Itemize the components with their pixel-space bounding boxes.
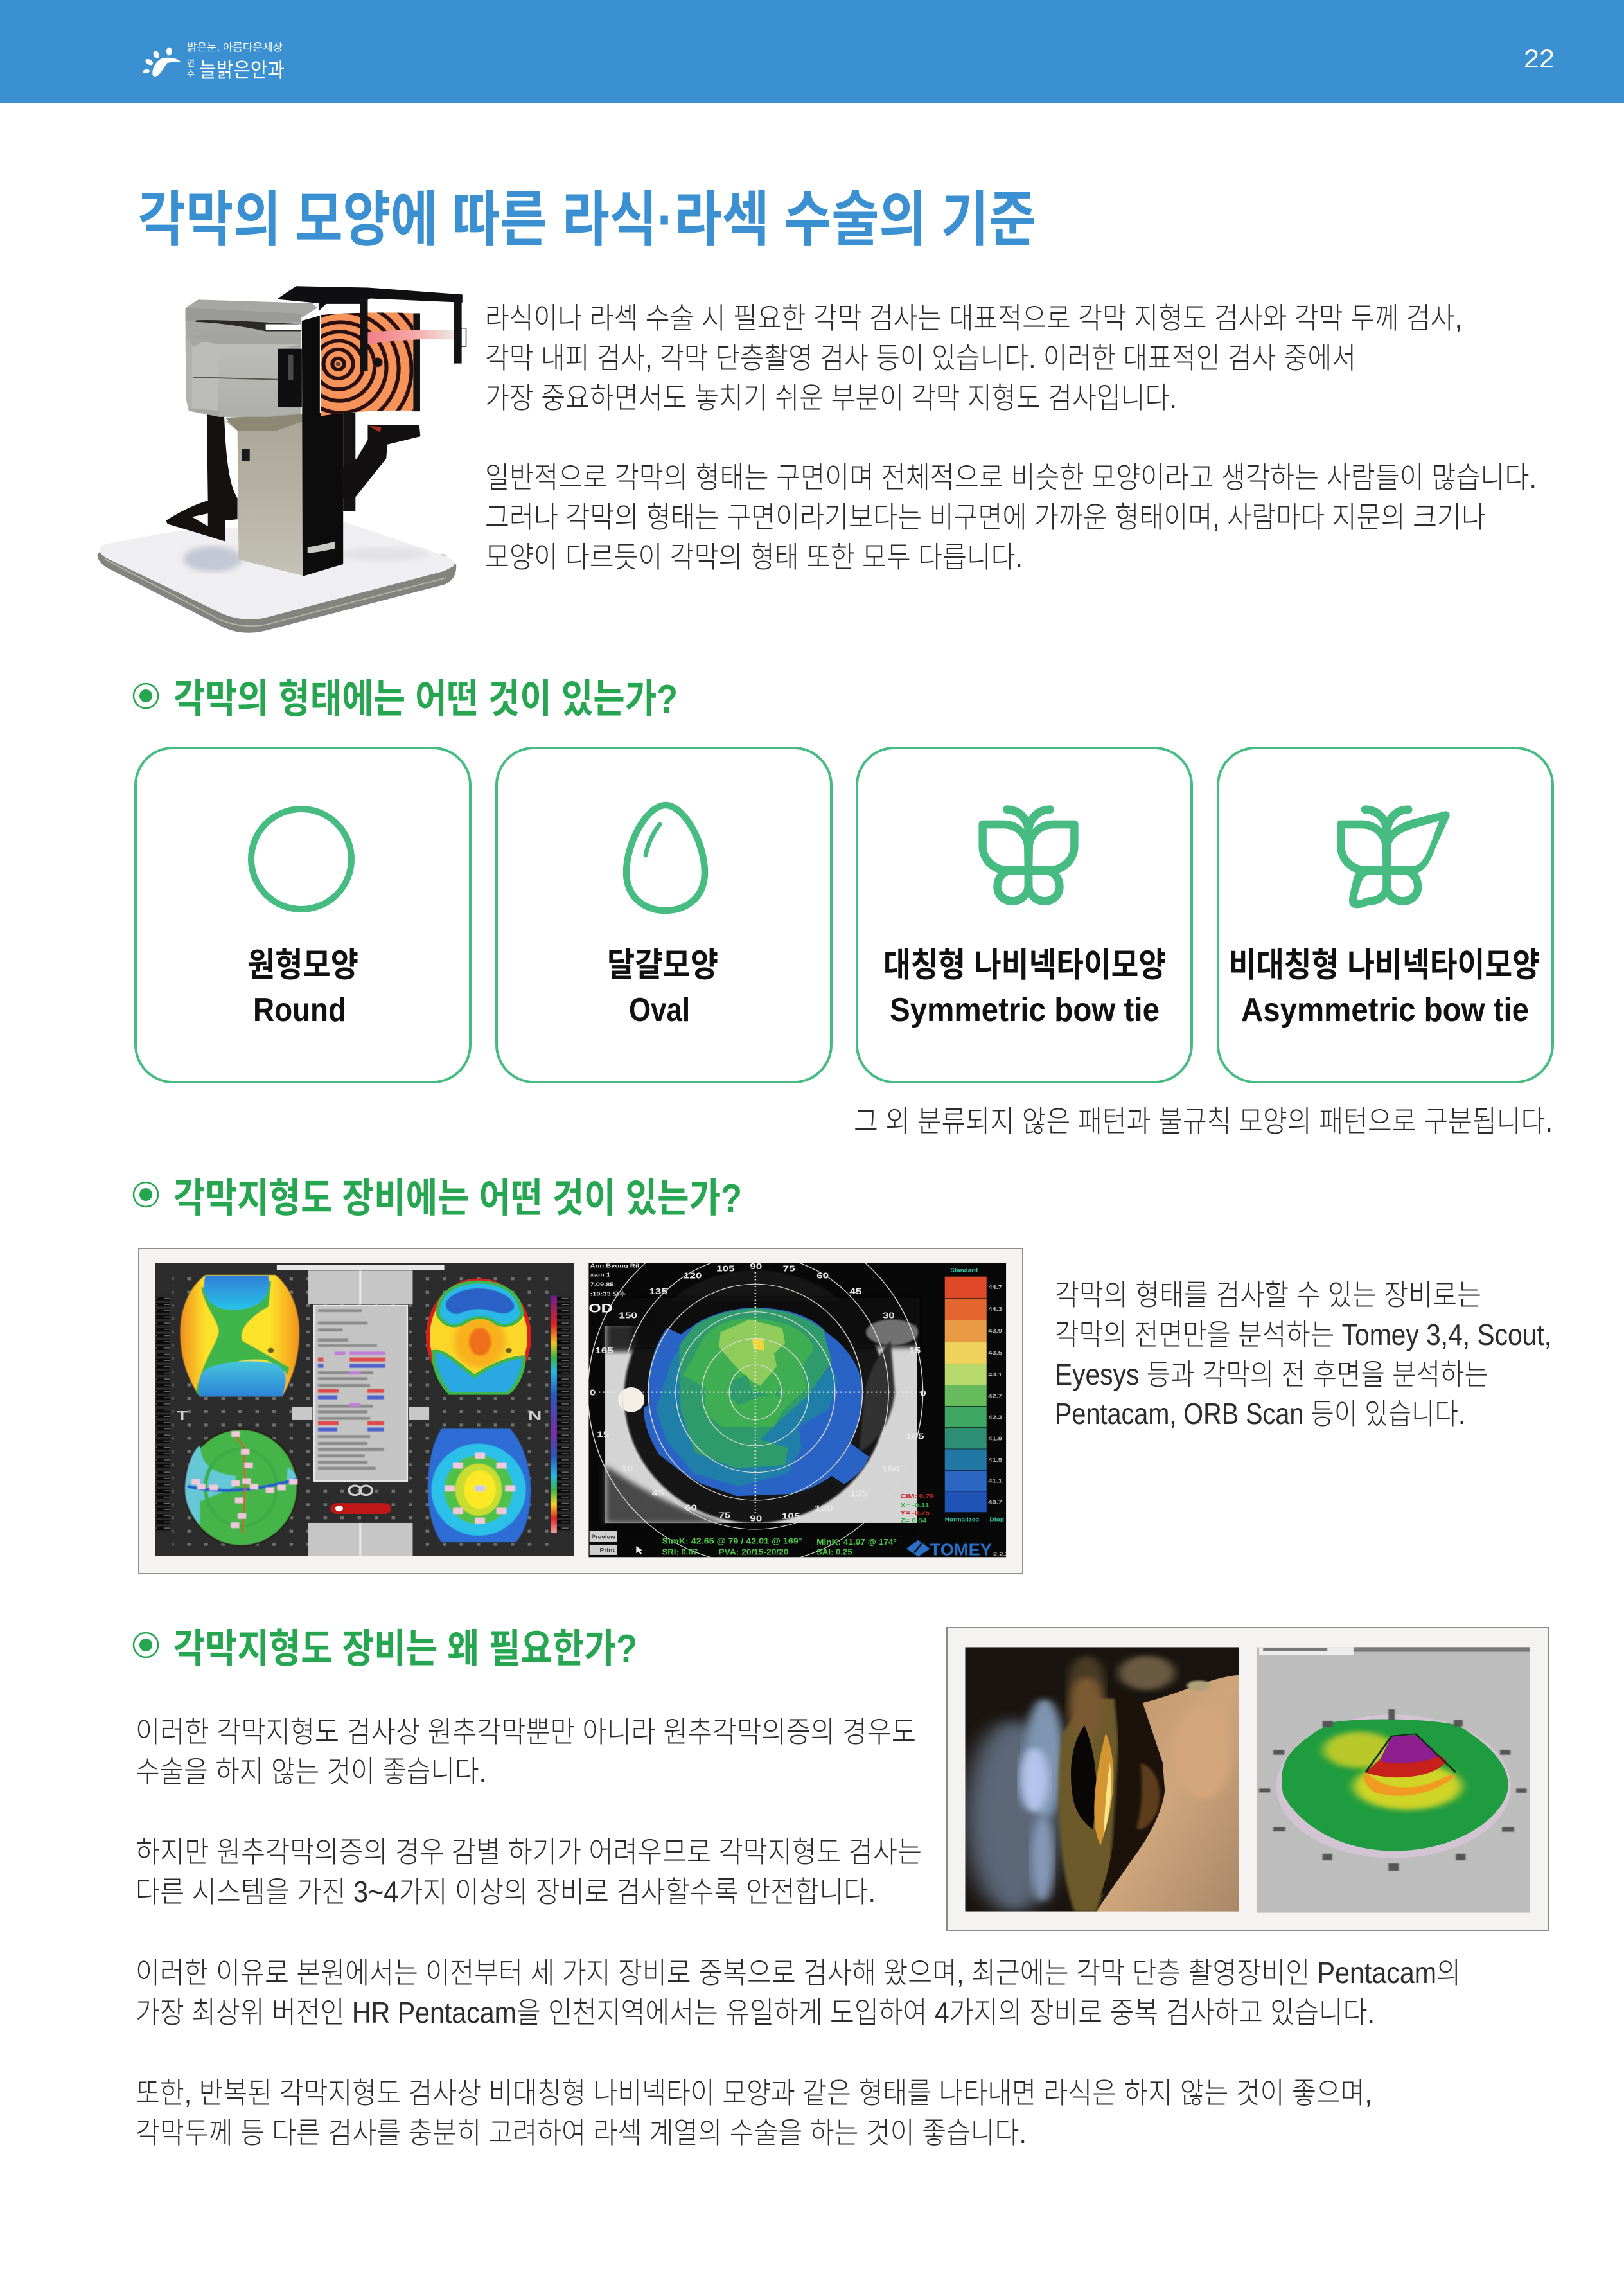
astigmatism values: CIM: 0.76 bbox=[901, 1493, 934, 1500]
elevation color scale: 41.1 bbox=[988, 1479, 1002, 1484]
map: elevation with markers bbox=[428, 1428, 531, 1542]
device rear frame bbox=[166, 409, 238, 542]
topography printout: four maps: T bbox=[177, 1409, 188, 1423]
map: axial with markers bbox=[185, 1429, 297, 1546]
intro text: 각막 내피 검사, 각막 단층촬영 검사 등이 있습니다. 이러한 대표적인 검사 중에서 bbox=[485, 341, 1356, 375]
header bar bbox=[0, 0, 1624, 103]
device top arm bbox=[277, 286, 463, 312]
patient info: Ann Byong Ril bbox=[590, 1263, 639, 1269]
card: symmetric bow tie bbox=[857, 748, 1192, 1082]
body text: need for topography: 이러한 각막지형도 검사상 원추각막뿐만 아니라 원추각막의증의 경우도 bbox=[136, 1715, 916, 1748]
stats and buttons bbox=[590, 1531, 1009, 1560]
elevation color scale: Normalized bbox=[945, 1516, 979, 1522]
Tomey topography map image: OD bbox=[588, 1301, 613, 1315]
angle labels: 135 bbox=[649, 1287, 667, 1296]
section heading: equipment types: 각막지형도 장비에는 어떤 것이 있는가? bbox=[173, 1177, 742, 1221]
card: oval: Oval bbox=[629, 991, 690, 1029]
card: round: Round bbox=[253, 991, 346, 1029]
astigmatism values: Y= -0.75 bbox=[901, 1509, 930, 1516]
angle labels: 150 bbox=[619, 1311, 637, 1320]
section heading: why needed: 각막지형도 장비는 왜 필요한가? bbox=[173, 1627, 637, 1671]
body text: need for topography: 이러한 이유로 본원에서는 이전부터 세 가지 장비로 중복으로 검사해 왔으며, 최근에는 각막 단층 촬영장비인 Pentacam의 bbox=[136, 1956, 1461, 1989]
astigmatism values: X= -0.11 bbox=[901, 1502, 929, 1509]
body text: need for topography: 다른 시스템을 가진 3~4가지 이상의 장비로 검사할수록 안전합니다. bbox=[136, 1875, 876, 1908]
stats and buttons: SAI: 0.25 bbox=[816, 1548, 852, 1557]
angle labels: 45 bbox=[849, 1287, 862, 1296]
body text: need for topography: 또한, 반복된 각막지형도 검사상 비대칭형 나비넥타이 모양과 같은 형태를 나타내면 라식은 하지 않는 것이 좋으며, bbox=[136, 2076, 1372, 2110]
concentric rings and crosshair bbox=[588, 1263, 924, 1558]
logo: 수 bbox=[187, 69, 195, 78]
card: oval: 달걀모양 bbox=[607, 947, 718, 984]
elevation color scale: 44.7 bbox=[988, 1285, 1002, 1291]
angle labels: 120 bbox=[815, 1504, 833, 1513]
astigmatism values: Z= 0.04 bbox=[901, 1517, 926, 1524]
elevation color scale: 42.7 bbox=[988, 1393, 1002, 1400]
patient info bbox=[590, 1263, 639, 1297]
angle labels: 15 bbox=[597, 1430, 610, 1439]
keratoconus image frame bbox=[947, 1628, 1549, 1930]
card: round: 원형모양 bbox=[247, 947, 358, 984]
patient info: 7.09.85 bbox=[590, 1281, 614, 1288]
body text: need for topography: 가장 최상위 버전인 HR Pentacam을 인천지역에서는 유일하게 도입하여 4가지의 장비로 중복 검사하고 있습니다. bbox=[136, 1996, 1375, 2029]
equipment description text bbox=[1055, 1278, 1551, 1430]
device column bbox=[225, 416, 303, 576]
angle labels: 75 bbox=[783, 1264, 795, 1274]
intro text: 가장 중요하면서도 놓치기 쉬운 부분이 각막 지형도 검사입니다. bbox=[485, 381, 1177, 414]
body text: need for topography: 각막두께 등 다른 검사를 충분히 고려하여 라섹 계열의 수술을 하는 것이 좋습니다. bbox=[136, 2116, 1027, 2149]
angle labels: 0 bbox=[920, 1389, 926, 1398]
angle labels: 90 bbox=[750, 1262, 762, 1271]
angle labels: 135 bbox=[849, 1489, 868, 1498]
map: anterior curvature bbox=[180, 1275, 299, 1396]
intro text bbox=[485, 301, 1537, 574]
intro text: 그러나 각막의 형태는 구면이라기보다는 비구면에 가까운 형태이며, 사람마다 지문의 크기나 bbox=[485, 501, 1486, 534]
patient info: :10:33 오후 bbox=[590, 1290, 626, 1297]
elevation color scale: 41.5 bbox=[988, 1457, 1002, 1464]
angle labels: 75 bbox=[719, 1511, 731, 1520]
intro text: 모양이 다르듯이 각막의 형태 또한 모두 다릅니다. bbox=[485, 540, 1023, 574]
elevation color scale: Diop bbox=[989, 1516, 1005, 1522]
elevation color scale: 40.7 bbox=[988, 1500, 1002, 1506]
card: round bbox=[136, 748, 470, 1082]
device scanner head bbox=[185, 299, 317, 417]
card: symmetric bow tie: 대칭형 나비넥타이모양 bbox=[883, 947, 1166, 984]
elevation color scale: 43.9 bbox=[988, 1328, 1002, 1335]
angle labels: 165 bbox=[906, 1432, 924, 1441]
card: oval bbox=[497, 748, 831, 1082]
section heading: corneal shapes: 각막의 형태에는 어떤 것이 있는가? bbox=[173, 677, 678, 722]
card: asymmetric bow tie: 비대칭형 나비넥타이모양 bbox=[1229, 947, 1540, 984]
angle labels: 15 bbox=[908, 1346, 921, 1355]
stats and buttons: Preview bbox=[591, 1534, 616, 1540]
body text: need for topography: 하지만 원추각막의증의 경우 감별 하기가 어려우므로 각막지형도 검사는 bbox=[136, 1835, 922, 1869]
device chin rest bbox=[340, 425, 420, 498]
corneal color map bbox=[644, 1308, 869, 1496]
elevation color scale: Standard bbox=[950, 1267, 978, 1273]
card: asymmetric bow tie bbox=[1218, 748, 1553, 1082]
equipment description text: Eyesys 등과 각막의 전 후면을 분석하는 bbox=[1055, 1358, 1488, 1391]
stats and buttons: 2.2.3 bbox=[993, 1551, 1009, 1558]
body text: need for topography bbox=[136, 1715, 1461, 2149]
logo: 늘밝은안과 bbox=[199, 58, 285, 82]
elevation color scale: 43.1 bbox=[988, 1372, 1002, 1378]
equipment description text: 각막의 형태를 검사할 수 있는 장비로는 bbox=[1055, 1278, 1481, 1311]
angle labels: 150 bbox=[881, 1464, 900, 1474]
angle labels: 105 bbox=[716, 1264, 735, 1274]
angle labels: 30 bbox=[883, 1311, 895, 1320]
logo bbox=[143, 42, 285, 82]
eye photograph background bbox=[601, 1270, 919, 1536]
device rods and band bbox=[360, 294, 466, 371]
logo: 밝은눈, 아름다운세상 bbox=[187, 42, 283, 53]
card: asymmetric bow tie: Asymmetric bow tie bbox=[1241, 991, 1529, 1029]
angle labels: 0 bbox=[590, 1388, 596, 1398]
elevation color scale: 44.3 bbox=[988, 1306, 1002, 1313]
angle labels: 45 bbox=[652, 1488, 664, 1498]
data panel bbox=[277, 1265, 445, 1556]
shape cards bbox=[136, 748, 1553, 1082]
angle labels: 90 bbox=[750, 1514, 762, 1524]
stats and buttons: Print bbox=[600, 1547, 615, 1553]
elevation color scale: 42.3 bbox=[988, 1414, 1002, 1421]
topography printout: four maps: N bbox=[528, 1409, 542, 1423]
3D cone surface bbox=[1276, 1714, 1511, 1858]
photo: keratoconus side view bbox=[965, 1647, 1239, 1913]
Tomey topography map image bbox=[588, 1263, 1006, 1558]
device placido target bbox=[321, 312, 420, 416]
map: posterior curvature bbox=[426, 1278, 531, 1395]
shapes footnote: 그 외 분류되지 않은 패턴과 불규칙 모양의 패턴으로 구분됩니다. bbox=[854, 1105, 1553, 1138]
intro text: 라식이나 라섹 수술 시 필요한 각막 검사는 대표적으로 각막 지형도 검사와 각막 두께 검사, bbox=[485, 301, 1462, 335]
topography image frame bbox=[139, 1249, 1023, 1574]
angle labels: 105 bbox=[782, 1511, 800, 1521]
angle labels: 60 bbox=[685, 1503, 697, 1513]
stats and buttons: SimK: 42.65 @ 79 / 42.01 @ 169° bbox=[662, 1537, 802, 1546]
stats and buttons: MinK: 41.97 @ 174° bbox=[816, 1538, 897, 1547]
angle labels: 60 bbox=[816, 1271, 829, 1281]
equipment description text: 각막의 전면만을 분석하는 Tomey 3,4, Scout, bbox=[1055, 1318, 1551, 1351]
keratoconus 3D topography map bbox=[1257, 1647, 1530, 1913]
equipment description text: Pentacam, ORB Scan 등이 있습니다. bbox=[1055, 1397, 1465, 1430]
stats and buttons: TOMEY bbox=[930, 1541, 992, 1560]
elevation color scale bbox=[945, 1267, 1005, 1522]
card: symmetric bow tie: Symmetric bow tie bbox=[890, 991, 1160, 1029]
intro text: 일반적으로 각막의 형태는 구면이며 전체적으로 비슷한 모양이라고 생각하는 사람들이 많습니다. bbox=[485, 461, 1537, 494]
device photo: corneal topographer bbox=[97, 286, 466, 633]
body text: need for topography: 수술을 하지 않는 것이 좋습니다. bbox=[136, 1755, 486, 1788]
page number: 22 bbox=[1524, 45, 1555, 73]
logo: 연 bbox=[187, 58, 195, 68]
angle labels bbox=[590, 1262, 926, 1524]
title: 각막의 모양에 따른 라식·라섹 수술의 기준 bbox=[138, 186, 1036, 253]
topography printout: four maps bbox=[155, 1263, 574, 1556]
patient info: xam 1 bbox=[590, 1272, 611, 1278]
device post bbox=[302, 316, 343, 576]
angle labels: 165 bbox=[595, 1346, 613, 1355]
angle labels: 120 bbox=[684, 1271, 702, 1281]
astigmatism values bbox=[901, 1493, 934, 1524]
device base plate bbox=[97, 522, 456, 633]
angle labels: 30 bbox=[621, 1464, 633, 1473]
stats and buttons: PVA: 20/15-20/20 bbox=[719, 1548, 789, 1557]
compass ticks bbox=[1259, 1709, 1526, 1871]
elevation color scale: 43.5 bbox=[988, 1350, 1002, 1356]
stats and buttons: SRI: 0.07 bbox=[662, 1548, 698, 1557]
elevation color scale: 41.9 bbox=[988, 1436, 1002, 1442]
